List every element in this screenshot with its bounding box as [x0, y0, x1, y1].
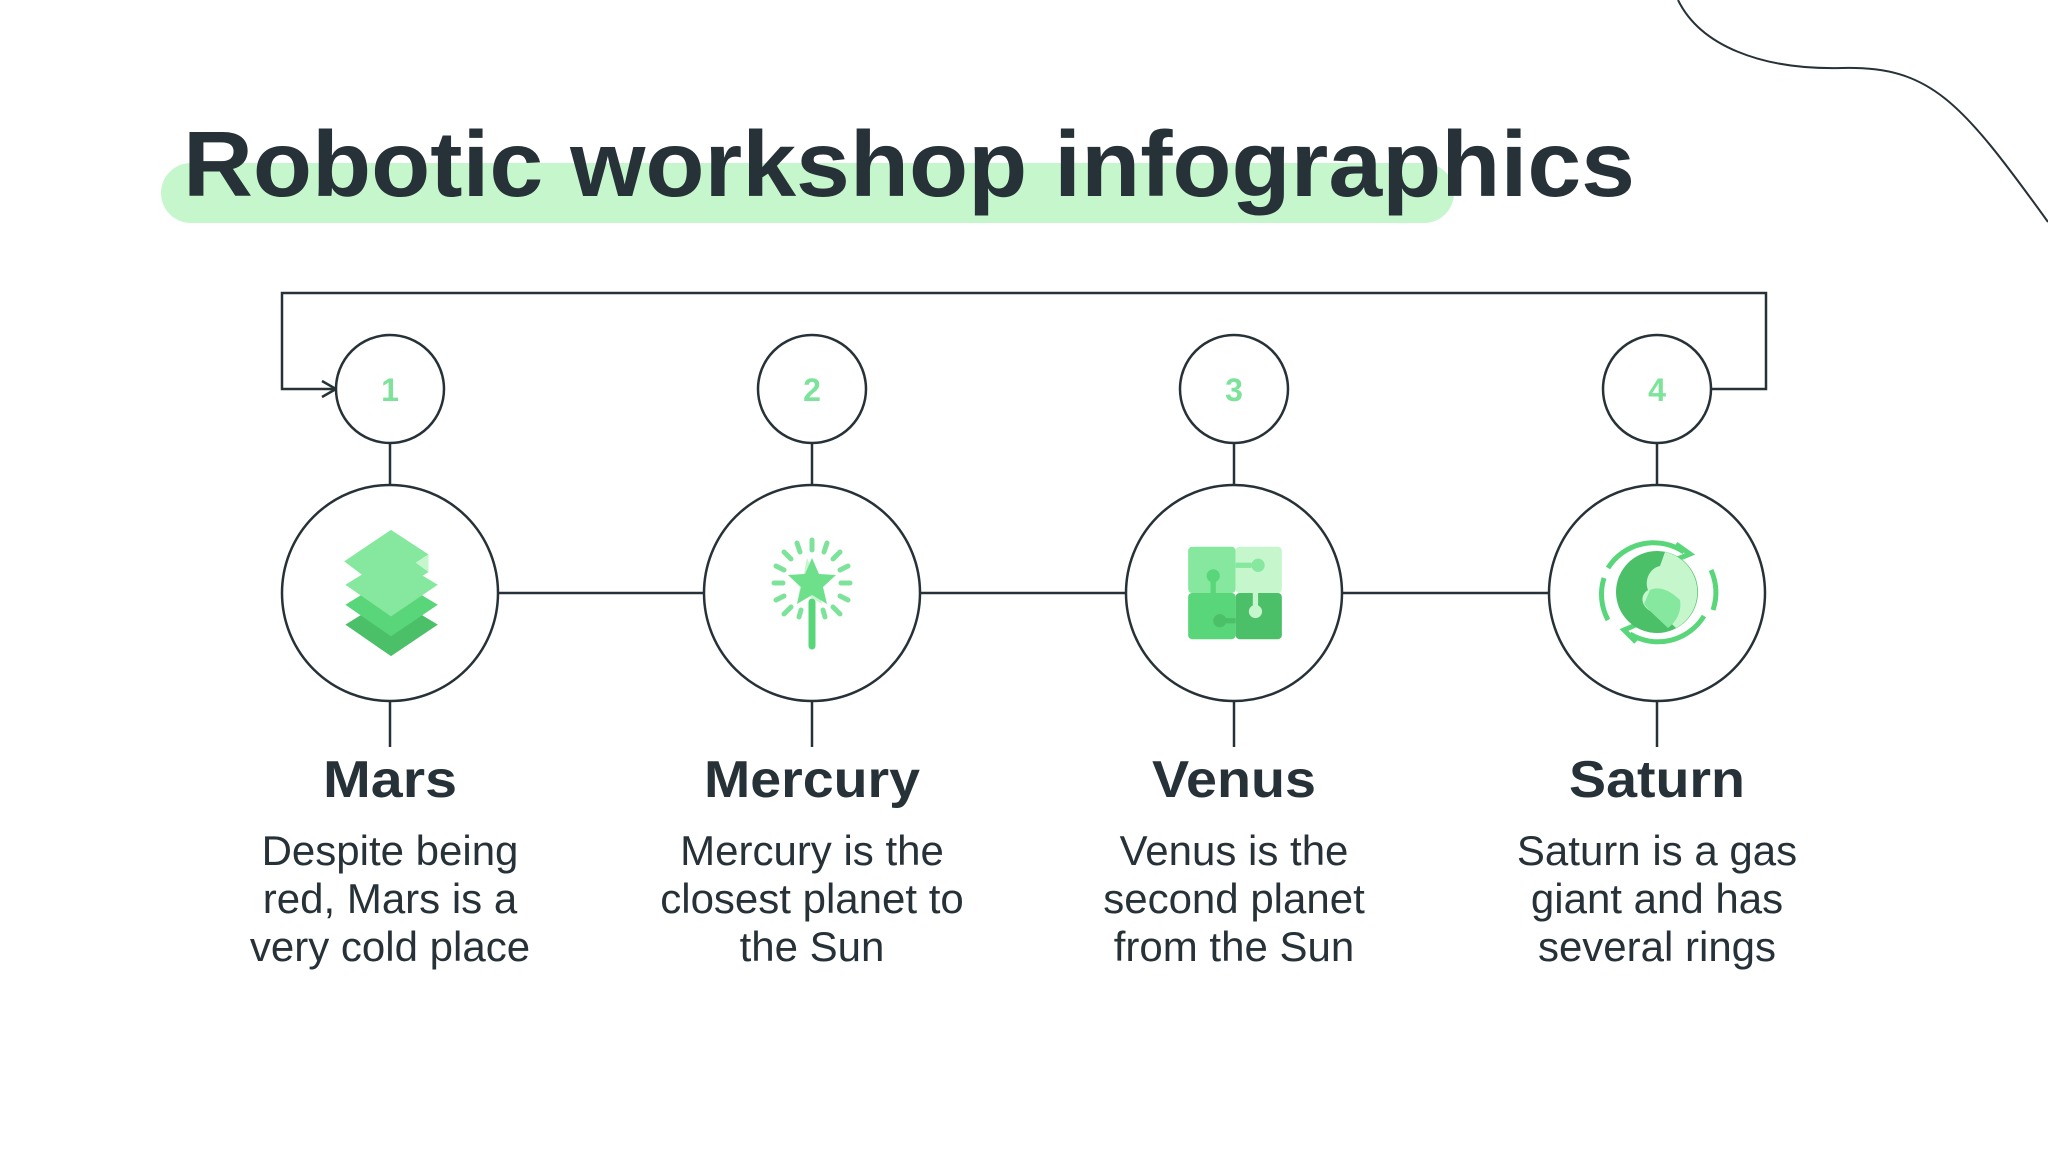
step 3: Venus: Venus is the [1120, 827, 1348, 874]
step 2: Mercury: closest planet to [660, 875, 964, 922]
step 4: Saturn: giant and has [1531, 875, 1783, 922]
loop arrow [282, 293, 1766, 397]
step 2: Mercury [660, 335, 964, 970]
connectors [390, 443, 1657, 747]
step 3: Venus: Venus [1152, 751, 1316, 809]
step 1: Mars [250, 335, 530, 970]
step 2: Mercury: 2 [803, 372, 821, 408]
step 4: Saturn: Saturn is a gas [1517, 827, 1797, 874]
icon: magic wand [774, 540, 850, 646]
step 2: Mercury: Mercury is the [680, 827, 944, 874]
icon: puzzle [1188, 547, 1282, 639]
step 3: Venus: from the Sun [1114, 923, 1354, 970]
decorative curve top right [1678, 0, 2048, 222]
step 1: Mars: red, Mars is a [263, 875, 518, 922]
step 3: Venus: second planet [1103, 875, 1365, 922]
step 3: Venus: 3 [1225, 372, 1243, 408]
step 1: Mars: 1 [381, 372, 399, 408]
step 2: Mercury: the Sun [740, 923, 884, 970]
step 1: Mars: very cold place [250, 923, 530, 970]
title: Robotic workshop infographics [183, 112, 1635, 216]
step 4: Saturn: several rings [1538, 923, 1776, 970]
icon: layers [344, 530, 438, 656]
icon: globe with arrows [1601, 543, 1716, 642]
step 4: Saturn: 4 [1648, 372, 1666, 408]
step 3: Venus [1103, 335, 1365, 970]
step 1: Mars: Despite being [262, 827, 518, 874]
step 4: Saturn [1517, 335, 1797, 970]
step 4: Saturn: Saturn [1569, 751, 1745, 809]
step 2: Mercury: Mercury [704, 751, 920, 809]
step 1: Mars: Mars [323, 751, 457, 809]
